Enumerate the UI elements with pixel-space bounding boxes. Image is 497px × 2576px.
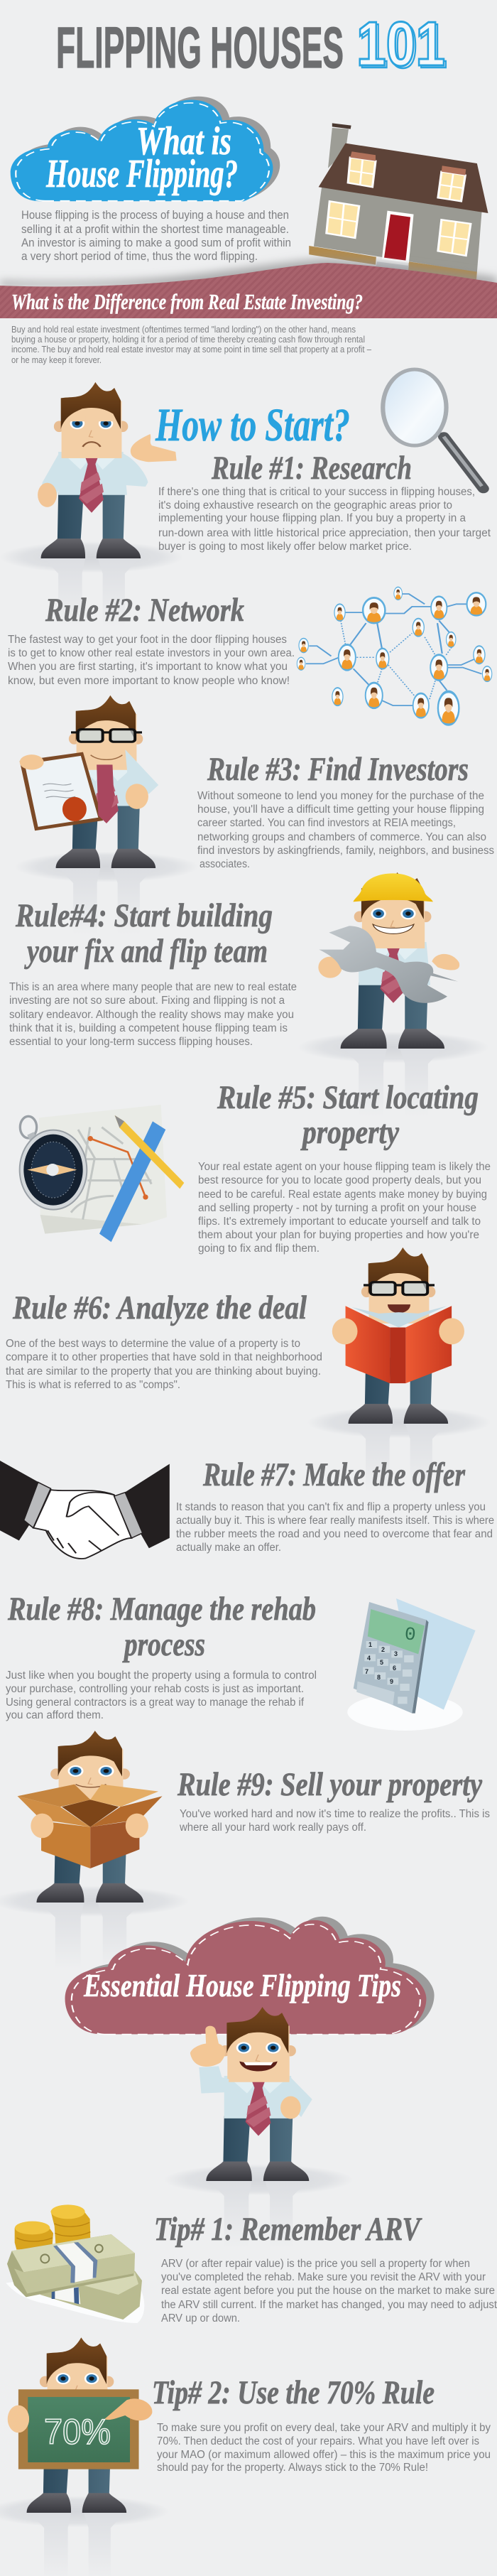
heading: rule 8: Rule #8: Manage the rehab [7, 1591, 316, 1628]
hard hat [353, 873, 433, 902]
calculator icon: 4 [367, 1655, 371, 1662]
text: rule 9: You've worked hard and now it's time to realize the profits.. This is [180, 1808, 490, 1820]
compass and map [20, 1105, 184, 1242]
calculator icon: 3 [394, 1650, 398, 1657]
text: rule 4: think that it is, building a competent house flipping team is [9, 1022, 288, 1034]
text: rule 1: buyer is going to most likely offer below market price. [158, 541, 412, 553]
text: rule 1: run-down area with little historical price appreciation, then your target [158, 527, 491, 539]
magnifying glass [383, 369, 484, 489]
text: rule 4 [9, 981, 297, 1048]
text: rule 5: flips. It's extremely important to educate yourself and talk to [198, 1216, 481, 1228]
panel: what is house flipping cloud: House Flipping? [45, 152, 238, 196]
calculator icon: 0 [404, 1623, 417, 1645]
text: rule 6 [6, 1338, 322, 1391]
network diagram [297, 587, 492, 725]
heading: rule 6: Rule #6: Analyze the deal [12, 1289, 307, 1326]
text: tip 1 [161, 2258, 497, 2325]
paragraph: buy and hold: buying a house or property, holding it for a period of time thereby creating cash flow through rental [11, 335, 365, 345]
text: rule 8: you can afford them. [6, 1709, 104, 1721]
panel: difference banner: What is the Difference from Real Estate Investing? [11, 289, 363, 314]
compass ring [20, 1116, 37, 1138]
calculator icon: 2 [381, 1646, 385, 1653]
wrench [319, 926, 458, 1003]
handshake icon [0, 1461, 170, 1559]
ruler [99, 1121, 165, 1242]
paragraph: buy and hold: income. The buy and hold real estate investor may at some point in time sell that property at a profit – [11, 345, 371, 355]
text: rule 2: The fastest way to get your foot in the door flipping houses [8, 634, 287, 646]
compass body [20, 1130, 87, 1210]
text: rule 4: This is an area where many people that are new to real estate [9, 981, 297, 993]
flaps [18, 1785, 90, 1807]
calculator icon: 1 [368, 1641, 372, 1648]
heading: rule 4: your fix and flip team [24, 933, 268, 970]
house illustration [309, 123, 488, 281]
heading: rule 2: Rule #2: Network [45, 592, 244, 629]
text: rule 8: your purchase, controlling your rehab costs is just as important. [6, 1683, 304, 1695]
paragraph: house flipping definition: selling it at a profit within the shortest time manageable. [21, 222, 289, 236]
panel: essential tips cloud: Essential House Flipping Tips [83, 1967, 401, 2003]
text: rule 3: networking groups and chambers of commerce. You can also [197, 831, 486, 843]
text: rule 3: associates. [200, 858, 250, 870]
text: rule 7: It stands to reason that you can't fix and flip a property unless you [176, 1501, 486, 1513]
text: rule 7 [176, 1501, 494, 1554]
paragraph: buy and hold: Buy and hold real estate investment (oftentimes termed "land lording") on the other hand, means [11, 325, 356, 335]
text: rule 1: it's doing exhaustive research on the geographic areas prior to [158, 499, 452, 512]
pencil [115, 1115, 184, 1189]
panel: what is house flipping cloud [11, 97, 280, 201]
text: rule 3: Without someone to lend you money for the purchase of the [197, 790, 484, 802]
character: man with chalkboard: 70% [44, 2412, 111, 2452]
text: rule 3: house, you'll have a difficult time getting your house flipping [197, 803, 484, 816]
calculator icon: 9 [390, 1678, 393, 1685]
text: tip 1: real estate agent before you put the house on the market to make sure [161, 2285, 495, 2297]
text: rule 2: is to get to know other real estate investors in your own area. [8, 647, 295, 659]
heading: rule 5: property [300, 1114, 399, 1151]
calculator icon: 7 [365, 1668, 368, 1675]
white base [6, 2278, 144, 2323]
panel: difference banner [0, 259, 497, 318]
character: thinking man [0, 382, 183, 627]
paragraph: house flipping definition [21, 208, 291, 263]
hands [8, 2405, 29, 2432]
coin stacks [15, 2223, 53, 2250]
hand right [432, 954, 459, 970]
board surface [28, 2397, 130, 2462]
cloud body [11, 99, 273, 201]
heading: how to start: How to Start? [155, 399, 350, 451]
character: reading man [307, 1248, 491, 1492]
text: rule 5: them about your plan for buying properties and how you're [198, 1229, 479, 1241]
heading: rule 4: Rule#4: Start building [15, 897, 273, 934]
panel: essential tips cloud [65, 1917, 435, 2035]
box interior [62, 1800, 119, 1827]
right arm [125, 749, 158, 794]
text: rule 2: know, but even more important to know people who know! [8, 675, 290, 687]
text: rule 1 [158, 486, 491, 553]
text: rule 5 [198, 1161, 491, 1255]
heading: rule 8: process [122, 1626, 205, 1663]
text: rule 4: investing are not so sure about. Fixing and flipping is not a [9, 995, 285, 1007]
paragraph: buy and hold: or he may keep it forever. [11, 355, 102, 365]
text: tip 2: should pay for the property. Always stick to the 70% Rule! [157, 2462, 428, 2474]
hands [31, 1814, 53, 1838]
text: rule 3: find investors by askingfriends, family, neighbors, and business [197, 845, 494, 857]
raised arm [199, 2066, 229, 2094]
text: rule 1: If there's one thing that is critical to your success in flipping houses, [158, 486, 475, 498]
lower bundle [40, 2271, 142, 2320]
calculator icon: 5 [380, 1659, 383, 1666]
text: rule 6: This is what is referred to as "comps". [6, 1379, 180, 1391]
text: rule 5: best resource for you to locate good property deals, but you [198, 1174, 481, 1186]
text: tip 1: you've completed the rehab. Make sure you revisit the ARV with your [161, 2271, 486, 2283]
text: rule 2: When you are first starting, it's important to know what you [8, 661, 288, 673]
box faces [41, 1821, 90, 1868]
text: rule 8: Just like when you bought the property using a formula to control [6, 1669, 317, 1682]
text: rule 8: Using general contractors is a great way to manage the rehab if [6, 1696, 305, 1709]
calculator icon: 6 [393, 1665, 396, 1672]
text: rule 8 [6, 1669, 317, 1721]
paragraph: house flipping definition: House flipping is the process of buying a house and then [21, 208, 289, 222]
panel: what is house flipping cloud: What is [136, 119, 231, 163]
calculator icon [347, 1598, 476, 1731]
text: rule 7: the rubber meets the road and you need to overcome that fear and [176, 1528, 493, 1540]
collar [352, 1306, 447, 1328]
text: rule 7: actually make an offer. [176, 1542, 281, 1554]
cloud shadow [18, 97, 280, 198]
clipboard [20, 752, 103, 830]
character: man pointing up [164, 2007, 353, 2248]
text: tip 1: ARV (or after repair value) is the price you sell a property for when [161, 2258, 470, 2270]
text: rule 6: that are similar to the property that you are thinking about buying. [6, 1365, 321, 1378]
paragraph: house flipping definition: An investor is aiming to make a good sum of profit within [21, 236, 291, 249]
text: rule 6: One of the best ways to determine the value of a property is to [6, 1338, 300, 1350]
text: rule 5: and selling property - not by turning a profit on your house [198, 1202, 476, 1214]
title: 101 [359, 11, 447, 81]
heading: rule 4 [15, 897, 273, 970]
text: tip 2: your MAO (or maximum allowed offer) – this is the maximum price you [157, 2449, 491, 2461]
right arm [287, 2077, 312, 2117]
text: rule 4: essential to your long-term success flipping houses. [9, 1036, 253, 1048]
text: tip 2: 70%. Then deduct the cost of your repairs. What you have left over is [157, 2435, 479, 2447]
text: rule 5: Your real estate agent on your house flipping team is likely the [198, 1161, 491, 1173]
character: man with box [0, 1731, 190, 1969]
character: man with clipboard [15, 696, 198, 935]
calculator icon: 8 [377, 1674, 381, 1681]
heading: tip 1: Tip# 1: Remember ARV [154, 2211, 422, 2248]
text: tip 2 [157, 2422, 491, 2474]
route [90, 1139, 146, 1197]
heading: tip 2: Tip# 2: Use the 70% Rule [152, 2374, 435, 2411]
character: builder with wrench [297, 872, 489, 1117]
hand left [318, 957, 342, 978]
paragraph: buy and hold [11, 325, 371, 365]
heading: rule 5 [217, 1079, 479, 1151]
heading: rule 8 [7, 1591, 316, 1663]
text: tip 2: To make sure you profit on every deal, take your ARV and multiply it by [157, 2422, 491, 2434]
text: rule 5: going to fix and flip them. [198, 1243, 320, 1255]
text: rule 1: implementing your house flipping plan. If you buy a property in a [158, 512, 466, 524]
upper bundle [7, 2234, 135, 2297]
text: rule 4: solitary endeavor. Although the reality shows may make you [9, 1009, 294, 1021]
paragraph: house flipping definition: a very short period of time, thus the word flipping. [21, 249, 258, 263]
text: tip 1: ARV up or down. [161, 2312, 240, 2325]
text: rule 2 [8, 634, 295, 687]
map [39, 1105, 167, 1234]
board frame [18, 2389, 139, 2469]
heading: rule 1: Rule #1: Research [211, 450, 412, 487]
text: rule 9 [179, 1808, 490, 1834]
coins and money [6, 2204, 144, 2323]
character: man with chalkboard [0, 2337, 169, 2576]
title: 101 [356, 9, 445, 79]
text: rule 6: compare it to other properties that have sold in that neighborhood [6, 1351, 322, 1363]
book [346, 1306, 390, 1383]
text: rule 3: career started. You can find investors at REIA meetings, [197, 817, 456, 829]
text: rule 3 [197, 790, 494, 870]
text: rule 5: need to be careful. Real estate agents make money by buying [198, 1189, 487, 1201]
text: rule 9: where all your hard work really pays off. [179, 1822, 366, 1834]
